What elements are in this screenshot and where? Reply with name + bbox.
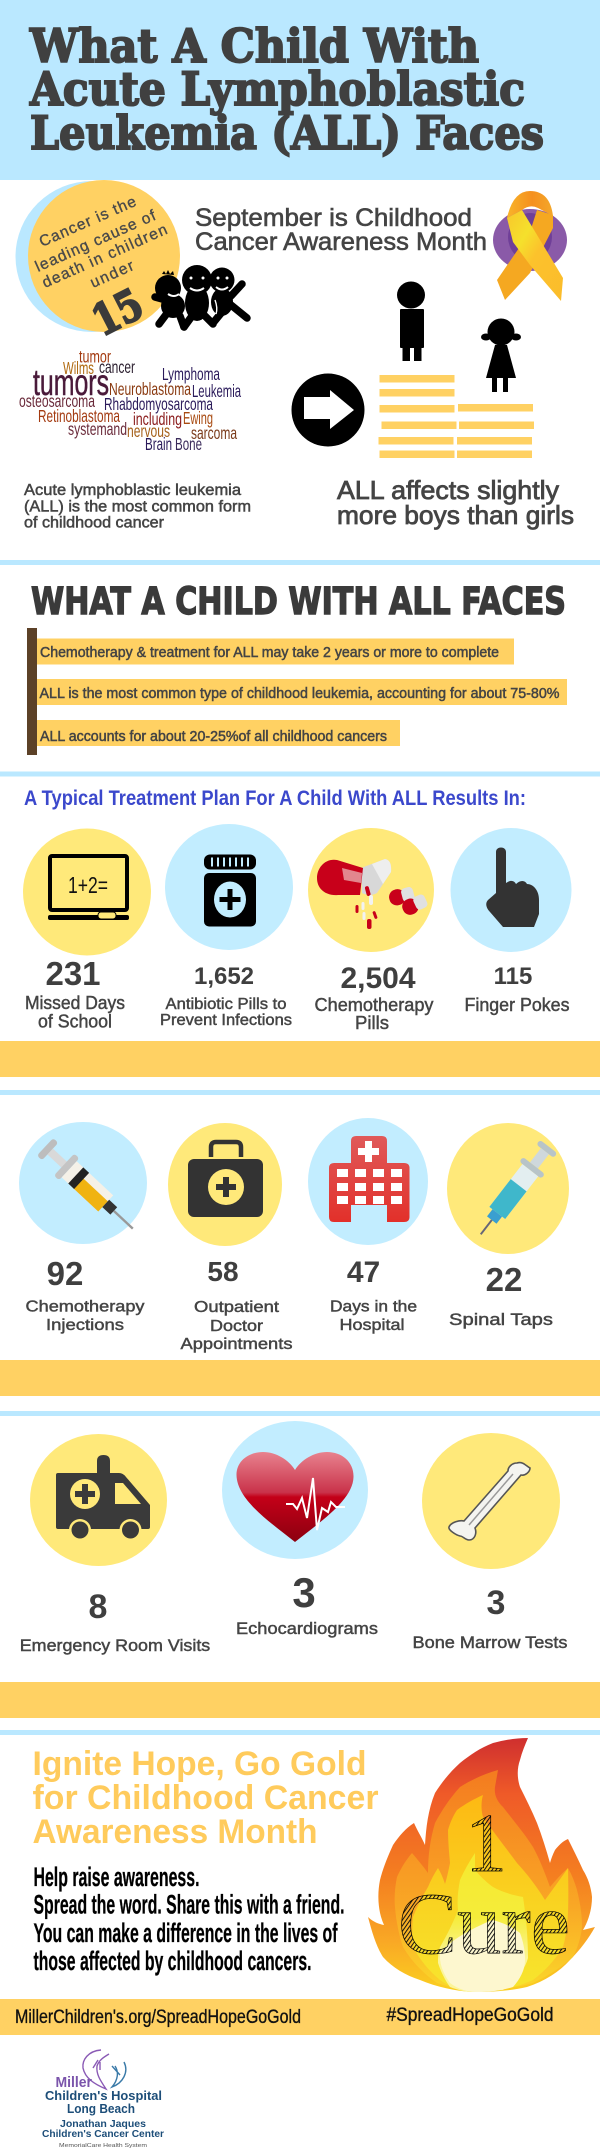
icon: pill bottle: [204, 854, 256, 926]
text: ALL common form: of childhood cancer: [24, 514, 164, 532]
text: ALL common form: (ALL) is the most common form: [24, 498, 251, 516]
stat: chemotherapy injections: 92: [47, 1255, 83, 1292]
stat: spinal taps: Spinal Taps: [449, 1310, 553, 1329]
callout: leading cause of death circle: Cancer is the: [37, 193, 139, 251]
bar chart: boys vs girls: [378, 375, 534, 458]
text: help raise awareness: You can make a difference in the lives of: [34, 1918, 338, 1948]
stat: echocardiograms: 3: [292, 1569, 316, 1616]
text: ALL common form: Acute lymphoblastic leukemia: [24, 482, 241, 499]
logo: Miller Children's Hospital: Jonathan Jaques: [60, 2118, 146, 2130]
stat: outpatient appointments: Doctor: [210, 1318, 264, 1335]
stat: echocardiograms: [222, 1421, 378, 1638]
icon: heart with ECG: [236, 1452, 354, 1542]
stat: bone marrow tests: 3: [487, 1584, 505, 1622]
word cloud: tumor: [79, 346, 111, 366]
word cloud: tumors: [33, 362, 109, 403]
icon: spilled capsules: [317, 859, 429, 929]
icon: flame with 1 Cure: [368, 1738, 595, 1992]
logo: Miller Children's Hospital: Children's Cancer Center: [42, 2128, 164, 2140]
stat: outpatient appointments: [168, 1123, 292, 1353]
stat: days in the hospital: Days in the: [330, 1298, 417, 1316]
text: help raise awareness: [34, 1862, 344, 1976]
text: boys vs girls: ALL affects slightly: [337, 475, 559, 505]
heading: ignite hope: for Childhood Cancer: [32, 1779, 378, 1817]
stat: chemotherapy injections: [19, 1122, 147, 1334]
callout: leading cause of death circle: 15: [84, 280, 152, 347]
stat: days in the hospital: [308, 1118, 428, 1334]
icon: three children: [155, 265, 247, 327]
word cloud: Leukemia: [192, 381, 241, 401]
logo: Miller Children's Hospital: Long Beach: [67, 2101, 135, 2116]
fact 1: [37, 638, 514, 664]
footer band: MillerChildren's.org/SpreadHopeGoGold: [15, 2007, 301, 2028]
icon: arrow in black circle: [292, 374, 364, 446]
icon: hospital building: [329, 1136, 410, 1222]
stat: chemotherapy injections: Injections: [46, 1317, 124, 1334]
stat: emergency room visits: 8: [89, 1588, 107, 1626]
word cloud: Neuroblastoma: [109, 379, 191, 399]
panel: facts list: [27, 628, 567, 755]
icon: flame with 1 Cure: Cure: [398, 1876, 570, 1973]
icon: flame with 1 Cure: 1: [465, 1797, 507, 1890]
word cloud: sarcoma: [191, 423, 237, 443]
heading: treatment plan: A Typical Treatment Plan For A Child With ALL Results In:: [24, 787, 526, 810]
icon: yellow syringe: [35, 1136, 143, 1240]
word cloud: Retinoblastoma: [38, 406, 120, 426]
word cloud: Brain: [145, 434, 172, 454]
icon: bone: [449, 1463, 530, 1540]
stat: antibiotic pills: 1,652: [194, 963, 254, 990]
text: help raise awareness: Help raise awareness.: [34, 1862, 200, 1892]
heading: ignite hope: Awareness Month: [32, 1813, 318, 1851]
word cloud: osteosarcoma: [19, 391, 95, 411]
word cloud: [19, 346, 241, 454]
stat: antibiotic pills: Antibiotic Pills to: [166, 996, 286, 1013]
fact 3: [37, 720, 400, 746]
icon: blue syringe: [470, 1138, 560, 1243]
fact 2: ALL is the most common type of childhood leukemia, accounting for about 75-80%: [40, 686, 560, 702]
icon: gold and purple ribbon: [493, 191, 567, 301]
stat: spinal taps: [447, 1123, 569, 1329]
word cloud: Wilms: [63, 358, 94, 378]
stat: echocardiograms: Echocardiograms: [236, 1620, 378, 1638]
word cloud: systemand: [68, 419, 127, 439]
stat: outpatient appointments: Appointments: [180, 1336, 292, 1353]
stat: bone marrow tests: [412, 1433, 568, 1652]
heading: ignite hope: Ignite Hope, Go Gold: [32, 1745, 366, 1783]
stat: spinal taps: 22: [486, 1261, 522, 1298]
stat: outpatient appointments: 58: [207, 1256, 239, 1287]
stat: antibiotic pills: Prevent Infections: [160, 1012, 292, 1029]
fact 1: Chemotherapy & treatment for ALL may take 2 years or more to complete: [40, 645, 499, 661]
footer band: #SpreadHopeGoGold: [386, 2005, 554, 2026]
icon: medical bag: [188, 1142, 263, 1217]
stat: days in the hospital: Hospital: [340, 1317, 404, 1334]
title: Leukemia (ALL) Faces: [30, 106, 544, 160]
stat: bone marrow tests: Bone Marrow Tests: [412, 1634, 568, 1652]
text: boys vs girls: more boys than girls: [337, 500, 574, 530]
logo: Miller Children's Hospital: Miller: [56, 2074, 92, 2091]
icon: ambulance: [56, 1455, 150, 1541]
stat: antibiotic pills: [160, 824, 293, 1029]
callout: leading cause of death circle: leading cause of: [33, 207, 159, 276]
word cloud: Lymphoma: [162, 364, 220, 384]
text: ALL common form: [24, 482, 251, 532]
stat: chemotherapy pills: Pills: [355, 1012, 389, 1033]
text: help raise awareness: those affected by childhood cancers.: [34, 1946, 312, 1976]
icon: boy figure: [397, 282, 425, 361]
stat: days in the hospital: 47: [347, 1256, 380, 1289]
text: boys vs girls: [337, 475, 574, 530]
heading: September awareness month: [195, 204, 487, 256]
stat: missed days of school: 231: [45, 955, 101, 992]
word cloud: Ewing: [183, 408, 213, 428]
stat: emergency room visits: Emergency Room Visits: [20, 1637, 210, 1655]
icon: pointing hand: [486, 848, 539, 927]
word cloud: Rhabdomyosarcoma: [104, 394, 213, 414]
heading: September awareness month: Cancer Awareness Month: [195, 228, 487, 256]
icon: chalkboard: [48, 856, 129, 920]
header banner: [0, 0, 600, 180]
stat: chemotherapy pills: Chemotherapy: [314, 994, 434, 1015]
word cloud: cancer: [99, 357, 135, 377]
callout: leading cause of death circle: under: [88, 257, 137, 292]
callout: leading cause of death circle: [16, 180, 180, 347]
logo: Miller Children's Hospital: Children's Hospital: [45, 2088, 162, 2103]
stat: missed days of school: of School: [38, 1010, 112, 1032]
text: help raise awareness: Spread the word. Share this with a friend.: [34, 1890, 344, 1920]
stat: chemotherapy pills: [308, 828, 434, 1033]
word cloud: Bone: [175, 434, 202, 454]
stat: missed days of school: [23, 828, 151, 1032]
stat: finger pokes: 115: [494, 963, 532, 990]
word cloud: nervous: [127, 421, 170, 441]
fact 2: [37, 679, 567, 705]
icon: chalkboard: 1+2=: [68, 872, 108, 898]
stat: emergency room visits: [20, 1434, 210, 1655]
stat: missed days of school: Missed Days: [25, 992, 125, 1013]
footer band: [0, 1999, 600, 2035]
icon: girl figure: [481, 318, 521, 392]
logo: Miller Children's Hospital: MemorialCare Health System: [59, 2143, 148, 2149]
stat: chemotherapy pills: 2,504: [340, 962, 416, 995]
heading: September awareness month: September is Childhood: [195, 204, 472, 232]
stat: chemotherapy injections: Chemotherapy: [26, 1298, 144, 1316]
logo: Miller Children's Hospital: [42, 2050, 164, 2149]
heading: ignite hope: [32, 1745, 378, 1851]
stat: outpatient appointments: Outpatient: [194, 1299, 280, 1316]
stat: finger pokes: [450, 828, 572, 1015]
title: [29, 19, 544, 160]
title: What A Child With: [29, 19, 479, 73]
stat: finger pokes: Finger Pokes: [464, 994, 570, 1015]
callout: leading cause of death circle: death in children: [40, 221, 170, 292]
word cloud: including: [133, 409, 182, 429]
title: Acute Lymphoblastic: [29, 62, 525, 116]
fact 3: ALL accounts for about 20-25%of all childhood cancers: [40, 729, 387, 745]
icon: dolphins: [83, 2050, 126, 2089]
